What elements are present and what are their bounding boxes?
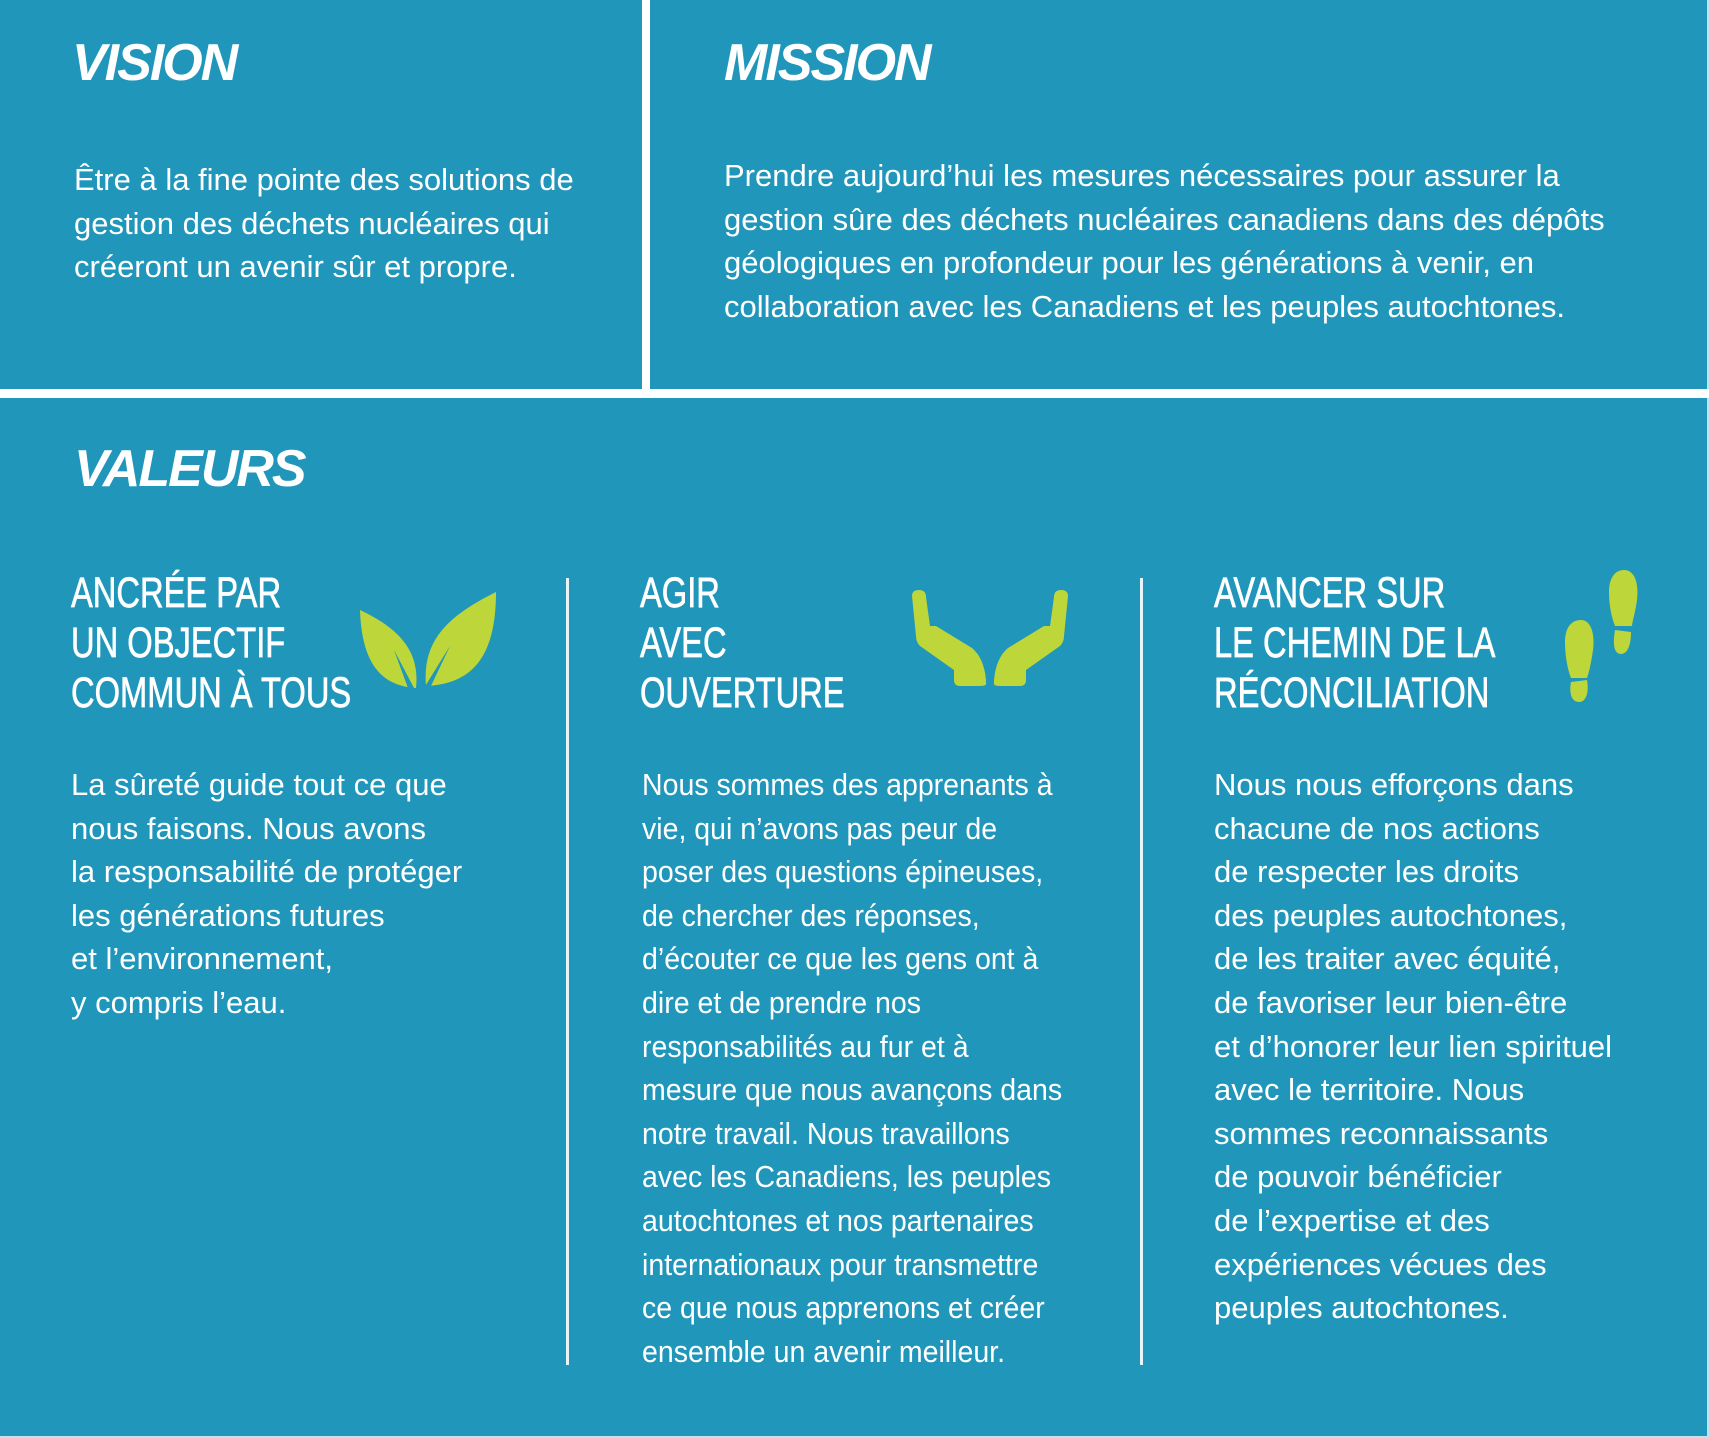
heading: ancrée: ANCRÉE PAR (71, 569, 281, 617)
column: avancer (1214, 569, 1612, 1325)
text: mission: gestion sûre des déchets nucléaires canadiens dans des dépôts (724, 202, 1605, 237)
heading: avancer (1214, 569, 1496, 717)
text: avancer: avec le territoire. Nous (1214, 1072, 1524, 1107)
text: agir: ensemble un avenir meilleur. (642, 1334, 1005, 1369)
text: mission: collaboration avec les Canadiens et les peuples autochtones. (724, 289, 1565, 324)
heading: agir: AGIR (640, 569, 720, 617)
heading: ancrée (70, 569, 351, 717)
heading: vision: VISION (72, 34, 236, 92)
text: avancer: et d’honorer leur lien spirituel (1214, 1029, 1612, 1064)
text: avancer: chacune de nos actions (1214, 811, 1540, 846)
text: agir: dire et de prendre nos (642, 985, 921, 1020)
icon: leaves (360, 592, 496, 688)
heading: avancer: AVANCER SUR (1214, 569, 1445, 617)
text: ancrée (71, 767, 462, 1020)
text: agir: vie, qui n’avons pas peur de (642, 811, 997, 846)
text: vision (74, 162, 574, 284)
text: mission: Prendre aujourd’hui les mesures nécessaires pour assurer la (724, 158, 1560, 193)
heading: agir: OUVERTURE (640, 669, 845, 717)
text: ancrée: La sûreté guide tout ce que (71, 767, 447, 802)
text: agir: notre travail. Nous travaillons (642, 1116, 1010, 1151)
panel: mission (724, 34, 1605, 324)
heading: avancer: LE CHEMIN DE LA (1214, 619, 1495, 667)
text: avancer: de l’expertise et des (1214, 1203, 1490, 1238)
text: agir: avec les Canadiens, les peuples (642, 1159, 1051, 1194)
text: vision: créeront un avenir sûr et propre. (74, 249, 517, 284)
text: avancer (1214, 767, 1612, 1325)
text: agir: d’écouter ce que les gens ont à (642, 941, 1038, 976)
text: mission (724, 158, 1605, 324)
text: mission: géologiques en profondeur pour les générations à venir, en (724, 245, 1534, 280)
heading: valeurs: VALEURS (74, 440, 305, 498)
heading: ancrée: COMMUN À TOUS (71, 669, 351, 717)
icon: footprints (1565, 570, 1638, 702)
text: avancer: de pouvoir bénéficier (1214, 1159, 1502, 1194)
text: ancrée: et l’environnement, (71, 941, 333, 976)
divider (1140, 578, 1143, 1365)
heading: agir: AVEC (640, 619, 727, 667)
text: ancrée: les générations futures (71, 898, 385, 933)
icon: hands (912, 590, 1068, 686)
text: avancer: de les traiter avec équité, (1214, 941, 1560, 976)
text: ancrée: la responsabilité de protéger (71, 854, 462, 889)
text: agir: Nous sommes des apprenants à (642, 767, 1053, 802)
text: agir: poser des questions épineuses, (642, 854, 1043, 889)
text: vision: Être à la fine pointe des solutions de (74, 162, 574, 197)
text: agir: responsabilités au fur et à (642, 1029, 969, 1064)
text: avancer: expériences vécues des (1214, 1247, 1547, 1282)
text: agir (642, 767, 1062, 1369)
column: ancrée (70, 569, 462, 1020)
text: agir: mesure que nous avançons dans (642, 1072, 1062, 1107)
heading: agir (640, 569, 845, 717)
text: vision: gestion des déchets nucléaires qui (74, 206, 550, 241)
text: avancer: des peuples autochtones, (1214, 898, 1567, 933)
text: avancer: de favoriser leur bien-être (1214, 985, 1567, 1020)
text: ancrée: y compris l’eau. (71, 985, 286, 1020)
heading: avancer: RÉCONCILIATION (1214, 669, 1489, 717)
panel: vision (72, 34, 574, 284)
column: agir (640, 569, 1062, 1369)
text: ancrée: nous faisons. Nous avons (71, 811, 426, 846)
heading: mission: MISSION (724, 34, 930, 92)
text: agir: autochtones et nos partenaires (642, 1203, 1034, 1238)
divider (566, 578, 569, 1365)
text: agir: internationaux pour transmettre (642, 1247, 1038, 1282)
text: avancer: Nous nous efforçons dans (1214, 767, 1574, 802)
heading: ancrée: UN OBJECTIF (71, 619, 285, 667)
text: agir: ce que nous apprenons et créer (642, 1290, 1045, 1325)
text: avancer: de respecter les droits (1214, 854, 1519, 889)
text: avancer: peuples autochtones. (1214, 1290, 1509, 1325)
text: agir: de chercher des réponses, (642, 898, 980, 933)
text: avancer: sommes reconnaissants (1214, 1116, 1548, 1151)
